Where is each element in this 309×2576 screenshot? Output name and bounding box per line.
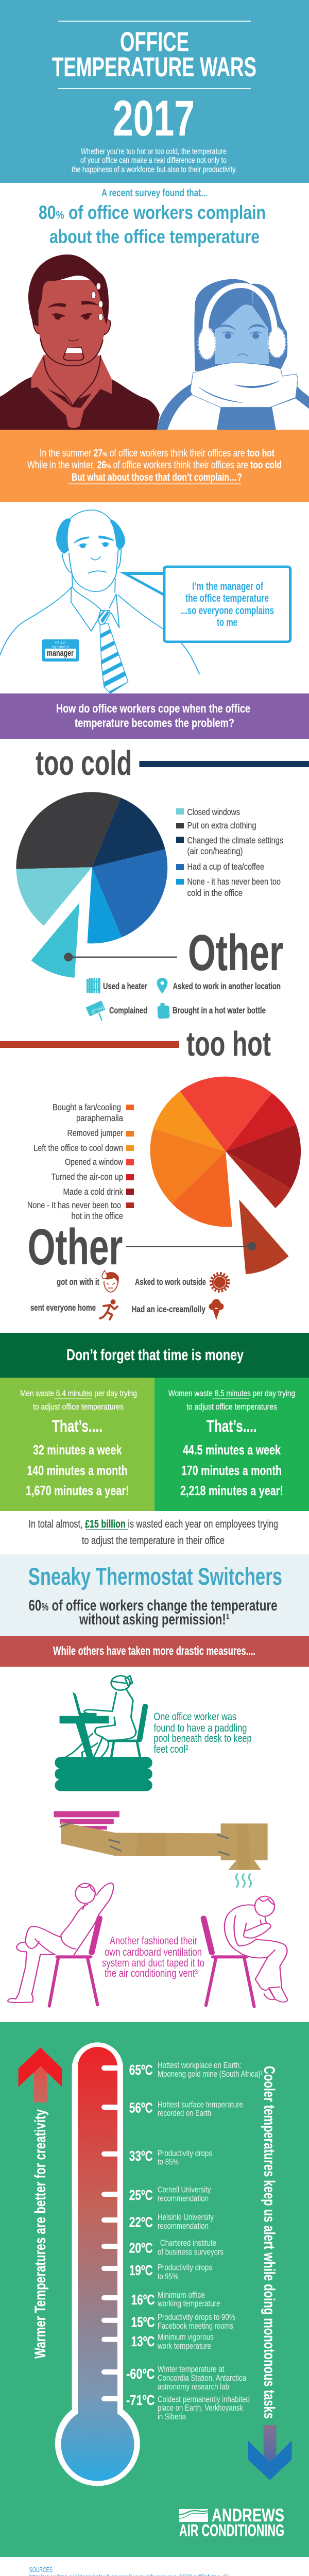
text: paddling pool: found to have a paddling <box>153 1722 247 1734</box>
arrow: warmer <box>19 2047 62 2103</box>
temperature descriptions: astronomy research lab <box>158 2382 229 2392</box>
temperature descriptions: to 95% <box>158 2272 178 2281</box>
temperature descriptions: work temperature <box>157 2341 211 2351</box>
panel: thermometer scale <box>0 2022 309 2557</box>
legend: too hot: hot in the office <box>71 1211 123 1221</box>
temperature labels: -60ºC <box>126 2366 154 2382</box>
panel: men: Men waste 6.4 minutes per day trying <box>20 1388 137 1398</box>
label: had an ice-cream/lolly: Had an ice-cream/lolly <box>132 1304 205 1314</box>
temperature descriptions: recommendation <box>158 2221 209 2231</box>
panel: men: That’s.... <box>52 1417 102 1435</box>
legend: too hot: Turned the air-con up <box>52 1172 123 1182</box>
intro text: Whether you’re too hot or too cold, the temperature <box>81 147 227 156</box>
text: cardboard ventilation: own cardboard ventilation <box>105 1946 202 1958</box>
temperature labels: 16ºC <box>131 2292 154 2308</box>
temperature labels: 15ºC <box>131 2314 154 2330</box>
callout: other (too hot): Other <box>28 1218 123 1275</box>
legend: too cold: cold in the office <box>187 888 243 898</box>
icon: location pin <box>157 978 168 994</box>
panel: men: to adjust office temperatures <box>33 1402 124 1412</box>
worker reclining <box>8 1883 113 2003</box>
heading: too cold: too cold <box>36 744 132 783</box>
temperature descriptions: Chartered institute <box>160 2238 216 2248</box>
legend: too hot <box>27 1102 134 1221</box>
name badge: my name is <box>52 644 69 649</box>
heading: too hot: too hot <box>186 1025 271 1063</box>
heading: too hot <box>0 1025 271 1063</box>
survey heading <box>39 188 266 247</box>
temperature descriptions: Facebook meeting rooms <box>158 2321 233 2331</box>
panel: orange complaint stats: In the summer 27% of office workers think their offices are too hot <box>40 448 274 459</box>
illustration: hot man <box>0 255 160 430</box>
legend: too hot: Bought a fan/cooling <box>53 1102 121 1112</box>
text: cardboard ventilation: the air conditioning vent³ <box>105 1968 198 1979</box>
year: 2017 <box>113 90 195 146</box>
temperature descriptions <box>157 2060 263 2421</box>
temperature descriptions: Hottest surface temperature <box>158 2100 243 2110</box>
legend: too cold: Had a cup of tea/coffee <box>187 861 264 872</box>
worker hunched <box>225 1896 288 2002</box>
panel: time is money: Don’t forget that time is money <box>66 1346 244 1364</box>
pie chart: too hot <box>150 1077 301 1274</box>
panel: orange complaint stats: While in the winter, 26% of office workers think their offices are too cold <box>27 460 282 471</box>
label: sent everyone home: sent everyone home <box>30 1302 96 1313</box>
title <box>52 27 256 82</box>
temperature labels: 33ºC <box>129 2148 153 2164</box>
panel: drastic measures band <box>0 1636 309 1667</box>
label: got on with it: got on with it <box>57 1277 99 1287</box>
legend: too cold: Put on extra clothing <box>187 820 256 831</box>
panel: men: 1,670 minutes a year! <box>26 1483 129 1498</box>
temperature descriptions: Productivity drops <box>158 2148 212 2158</box>
temperature labels: -71ºC <box>126 2392 154 2408</box>
temperature labels: 22ºC <box>129 2214 153 2230</box>
icon: complaint sign: @*%&! <box>90 1004 106 1015</box>
panel: men: 140 minutes a month <box>27 1463 128 1478</box>
name badge <box>42 639 79 662</box>
temperature descriptions: Mponeng gold mine (South Africa)¹ <box>158 2069 263 2079</box>
title: OFFICE <box>120 27 189 57</box>
name badge: manager <box>47 648 74 658</box>
temperature descriptions: to 85% <box>158 2157 179 2167</box>
illustration: worker in paddling pool <box>55 1676 152 1791</box>
temperature descriptions: Productivity drops <box>158 2263 212 2273</box>
legend: too cold: Closed windows <box>187 807 240 817</box>
panel: orange complaint stats: But what about those that don’t complain…? <box>72 472 242 483</box>
panel: sneaky thermostat switchers: without asking permission!¹ <box>79 1611 230 1628</box>
temperature labels: 20ºC <box>129 2240 153 2256</box>
illustration: balding manager <box>0 510 199 704</box>
temperature descriptions: recommendation <box>158 2194 209 2204</box>
legend: too hot: Removed jumper <box>67 1128 123 1138</box>
temperature labels <box>126 2062 154 2408</box>
legend: too hot: Opened a window <box>65 1157 123 1167</box>
rotated label: warmer: Warmer Temperatures are better for creativity <box>32 2109 49 2359</box>
text: total wasted <box>29 1518 278 1547</box>
icon: radiator <box>87 978 100 993</box>
legend: too cold: Changed the climate settings <box>187 835 283 845</box>
panel: orange complaint stats <box>0 430 309 502</box>
callout: other (too hot) <box>28 1218 256 1275</box>
panel: sneaky thermostat switchers <box>0 1554 309 1636</box>
arrow: cooler <box>248 2425 291 2480</box>
temperature descriptions: Minimum office <box>158 2290 205 2300</box>
temperature descriptions: Coldest permanently inhabited <box>158 2395 250 2404</box>
temperature descriptions: Productivity drops to 90% <box>158 2312 235 2322</box>
icon: sun <box>212 1274 228 1291</box>
panel: time is money <box>0 1333 309 1511</box>
survey heading: about the office temperature <box>49 226 260 247</box>
intro text: of your office can make a real difference not only to <box>80 156 227 165</box>
temperature labels: 13ºC <box>131 2333 154 2349</box>
legend: too hot: Made a cold drink <box>63 1187 123 1197</box>
logo: Andrews Air Conditioning: ANDREWS <box>212 2505 284 2526</box>
panel: women <box>154 1378 309 1511</box>
panel: men: 32 minutes a week <box>33 1442 122 1458</box>
callout: other (too cold) <box>64 924 283 981</box>
speech bubble: I’m the manager of <box>192 581 264 592</box>
pie chart: too cold <box>16 792 167 978</box>
legend: too hot: None - It has never been too <box>27 1200 121 1210</box>
legend: too cold: (air con/heating) <box>187 846 243 856</box>
text: paddling pool: feet cool² <box>153 1743 188 1755</box>
icon: hot water bottle <box>157 1003 170 1019</box>
text: cardboard ventilation: Another fashioned their <box>110 1935 197 1947</box>
text: cardboard ventilation <box>102 1935 204 1979</box>
temperature descriptions: Winter temperature at <box>158 2364 225 2374</box>
illustration: cardboard ventilation duct <box>54 1811 268 1887</box>
panel: women: to adjust office temperatures <box>186 1402 277 1412</box>
temperature descriptions: Concordia Station, Antarctica <box>158 2373 246 2383</box>
label: brought in a hot water bottle: Brought in a hot water bottle <box>173 1005 266 1015</box>
temperature descriptions: Minimum vigorous <box>158 2332 214 2342</box>
icon: complaint sign <box>86 1001 106 1021</box>
necktie <box>98 610 129 693</box>
icon: sweating face <box>102 1270 119 1292</box>
legend: too cold: None - it has never been too <box>187 876 281 887</box>
text: paddling pool <box>153 1711 251 1755</box>
heading: too cold <box>36 744 309 783</box>
label: used a heater: Used a heater <box>103 981 147 991</box>
icon: ice cream <box>209 1299 224 1320</box>
intro text: the happiness of a workforce but also to their productivity. <box>72 165 237 174</box>
label: complained: Complained <box>109 1005 147 1015</box>
sources <box>29 2566 280 2576</box>
temperature labels: 19ºC <box>129 2262 153 2278</box>
survey heading: 80% of office workers complain <box>39 202 266 223</box>
panel: title header <box>0 0 309 183</box>
temperature labels: 25ºC <box>129 2187 153 2203</box>
panel: women: 44.5 minutes a week <box>183 1442 281 1458</box>
legend: too cold <box>176 807 283 898</box>
rotated label: cooler: Cooler temperatures keep us alert while doing monotonous tasks <box>261 2066 278 2419</box>
speech bubble: ...so everyone complains <box>181 605 274 617</box>
label: asked to work outside: Asked to work outside <box>135 1277 206 1287</box>
temperature descriptions: Hottest workplace on Earth: <box>158 2060 242 2070</box>
temperature descriptions: Cornell University <box>158 2185 211 2195</box>
panel: purple question band <box>0 693 309 739</box>
speech bubble: to me <box>217 617 237 629</box>
temperature descriptions: place on Earth, Verkhoyansk <box>158 2403 243 2413</box>
temperature descriptions: working temperature <box>157 2299 220 2309</box>
panel: purple question band: How do office workers cope when the office <box>56 702 250 715</box>
icon: runner <box>100 1299 117 1319</box>
legend: too hot: Left the office to cool down <box>33 1143 123 1153</box>
illustration: two workers on chairs <box>8 1883 288 2007</box>
text: total wasted: to adjust the temperature in their office <box>82 1535 225 1547</box>
panel: men <box>0 1378 154 1511</box>
temperature labels: 65ºC <box>129 2062 153 2078</box>
temperature descriptions: Helsinki University <box>158 2212 214 2222</box>
sources: SOURCES <box>29 2566 53 2574</box>
temperature labels: 56ºC <box>129 2100 153 2116</box>
temperature descriptions: in Siberia <box>158 2412 186 2421</box>
text: paddling pool: One office worker was <box>153 1711 236 1723</box>
logo: Andrews Air Conditioning <box>179 2505 284 2540</box>
panel: women: That’s.... <box>207 1417 257 1435</box>
illustration: cold woman <box>157 279 309 430</box>
text: paddling pool: pool beneath desk to keep <box>153 1733 251 1744</box>
legend: too hot: paraphernalia <box>76 1113 123 1123</box>
panel: purple question band: temperature becomes the problem? <box>75 716 234 730</box>
temperature descriptions: of business surveyors <box>158 2247 224 2257</box>
temperature descriptions: recorded on Earth <box>158 2108 211 2118</box>
intro text <box>72 147 237 174</box>
text: cardboard ventilation: system and duct taped it to <box>102 1957 204 1969</box>
speech bubble <box>119 567 290 642</box>
name badge: HELLO <box>55 640 65 645</box>
speech bubble: the office temperature <box>185 592 269 604</box>
thermometer <box>55 2042 140 2486</box>
survey heading: A recent survey found that... <box>101 188 208 199</box>
